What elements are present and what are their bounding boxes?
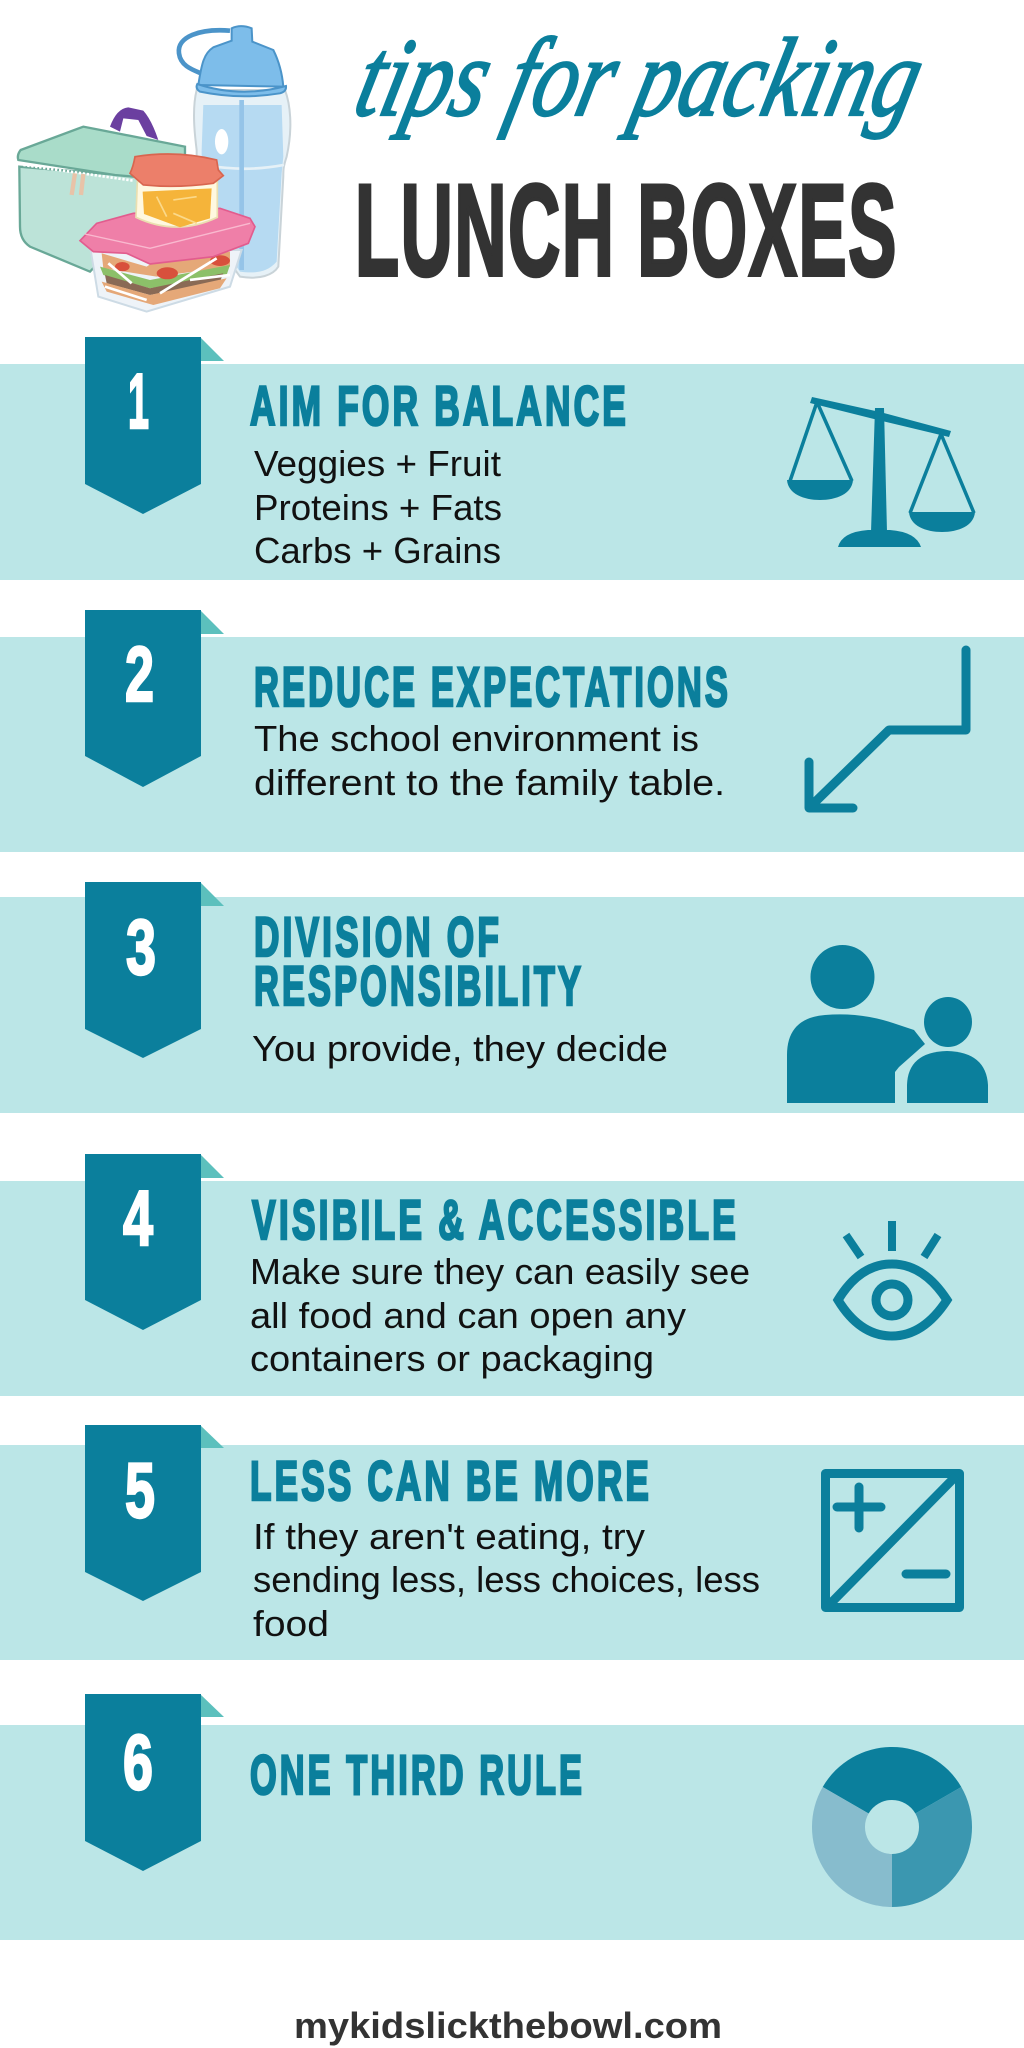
heading 6: ONE THIRD RULE bbox=[250, 1743, 585, 1806]
body text 1: Proteins + Fats bbox=[254, 487, 502, 528]
body text 5: food bbox=[253, 1603, 329, 1644]
body text 1 bbox=[254, 443, 502, 571]
ribbon 4 bbox=[85, 1154, 224, 1330]
icon: jar of pasta bbox=[130, 154, 223, 227]
number 2: 2 bbox=[125, 630, 154, 718]
number 3: 3 bbox=[126, 903, 156, 991]
panel: tip 4 visible and accessible bbox=[0, 1154, 1024, 1396]
number 6: 6 bbox=[123, 1718, 153, 1806]
heading 2: REDUCE EXPECTATIONS bbox=[254, 655, 731, 718]
icon: water bottle bbox=[179, 26, 290, 278]
number 4: 4 bbox=[123, 1174, 153, 1262]
body text 1: Veggies + Fruit bbox=[254, 443, 501, 484]
panel: tip 1 aim for balance bbox=[0, 337, 1024, 580]
body text 2: different to the family table. bbox=[254, 762, 725, 803]
body text 4: containers or packaging bbox=[250, 1338, 654, 1379]
icon: sandwich box bbox=[80, 208, 255, 312]
icon: down-left stepped arrow bbox=[809, 650, 966, 808]
illustration: lunch box, water bottle, jar and sandwich box bbox=[18, 26, 290, 312]
body text 5: If they aren't eating, try bbox=[253, 1516, 645, 1557]
heading 3 bbox=[254, 905, 584, 1017]
body text 4: Make sure they can easily see bbox=[250, 1251, 750, 1292]
heading 3: RESPONSIBILITY bbox=[254, 954, 584, 1017]
panel: tip 1 aim for balance: 1 bbox=[128, 357, 149, 445]
panel: tip 5 less can be more bbox=[0, 1425, 1024, 1660]
body text 2 bbox=[254, 718, 725, 803]
body text 1: Carbs + Grains bbox=[254, 530, 501, 571]
number 5: 5 bbox=[125, 1446, 155, 1534]
heading 5: LESS CAN BE MORE bbox=[250, 1449, 652, 1512]
icon: eye bbox=[838, 1221, 947, 1336]
heading 4: VISIBILE & ACCESSIBLE bbox=[252, 1188, 739, 1251]
ribbon 3 bbox=[85, 882, 224, 1058]
chart: donut of three equal thirds bbox=[812, 1747, 972, 1907]
heading 1: AIM FOR BALANCE bbox=[250, 374, 629, 437]
body text 5 bbox=[253, 1516, 760, 1644]
body text 4: all food and can open any bbox=[250, 1295, 686, 1336]
footer: website: mykidslickthebowl.com bbox=[294, 2005, 722, 2046]
heading 3: DIVISION OF bbox=[254, 905, 502, 968]
ribbon 2 bbox=[85, 610, 224, 787]
panel: tip 6 one third rule bbox=[0, 1694, 1024, 1940]
body text 4 bbox=[250, 1251, 750, 1379]
panel: tip 2 reduce expectations bbox=[0, 610, 1024, 852]
body text 5: sending less, less choices, less bbox=[253, 1559, 760, 1600]
ribbon 1 bbox=[85, 337, 224, 514]
icon: plus minus box bbox=[826, 1474, 960, 1608]
ribbon 6 bbox=[85, 1694, 224, 1871]
body text 2: The school environment is bbox=[254, 718, 699, 759]
panel: tip 3 division of responsibility bbox=[0, 882, 1024, 1113]
icon: green lunch box bbox=[18, 107, 185, 272]
ribbon 5 bbox=[85, 1425, 224, 1601]
icon: adult and child bbox=[787, 945, 988, 1103]
body text 3: You provide, they decide bbox=[252, 1028, 668, 1069]
icon: balance scale bbox=[787, 397, 975, 547]
